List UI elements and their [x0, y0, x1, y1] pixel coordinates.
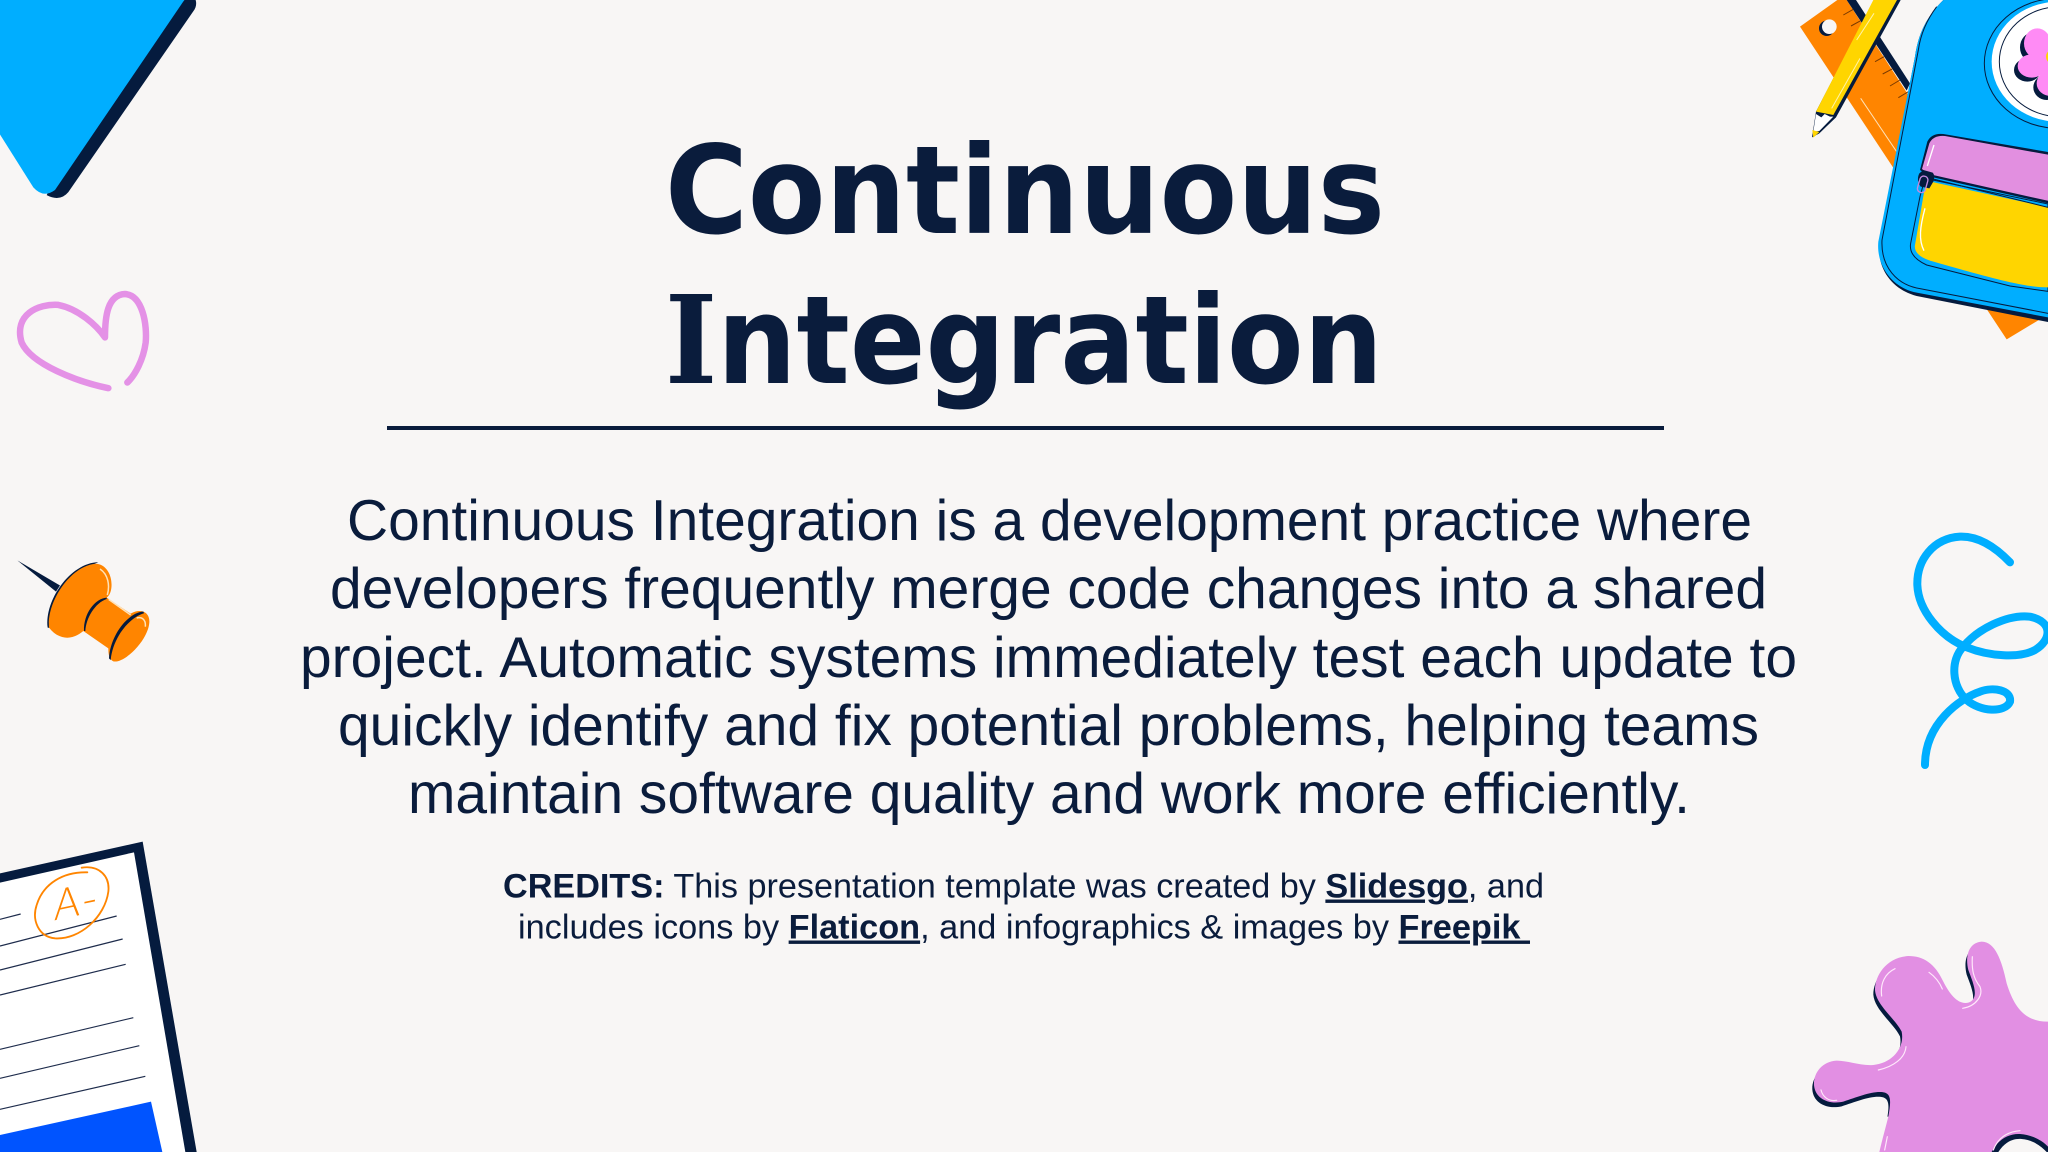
- icon: backpack with ruler and pencil: [1800, 0, 2048, 339]
- round patch: [1984, 0, 2048, 128]
- pencil: [1812, 0, 1901, 138]
- credits: [503, 868, 1544, 946]
- title: [665, 120, 1385, 412]
- description text: quickly identify and fix potential problems, helping teams: [338, 694, 1759, 758]
- title divider: [387, 426, 1664, 430]
- description text: developers frequently merge code changes into a shared: [330, 557, 1767, 621]
- icon: graded paper: [0, 842, 197, 1152]
- ruler: [1800, 0, 2048, 339]
- icon: orange push pin: [17, 560, 149, 662]
- icon: blue book corner: [0, 0, 196, 198]
- icon: pink heart doodle: [20, 294, 146, 388]
- description text: project. Automatic systems immediately test each update to: [300, 626, 1797, 690]
- title: Integration: [665, 268, 1383, 412]
- zipper pull: [1918, 170, 1934, 188]
- description text: Continuous Integration is a development practice where: [347, 489, 1752, 553]
- icon: pink paint splat: [1812, 942, 2048, 1152]
- flower: [2014, 28, 2048, 100]
- description text: maintain software quality and work more efficiently.: [408, 762, 1690, 826]
- description text: [300, 489, 1797, 826]
- title: Continuous: [665, 120, 1385, 262]
- grade mark: A-: [53, 873, 97, 931]
- icon: blue squiggle: [1917, 537, 2048, 765]
- bag body: [1879, 0, 2048, 322]
- pocket: [1920, 134, 2048, 203]
- credits: CREDITS: This presentation template was created by Slidesgo, and: [503, 868, 1544, 906]
- credits: includes icons by Flaticon, and infographics & images by Freepik: [518, 908, 1530, 946]
- paper text lines: [0, 914, 145, 1109]
